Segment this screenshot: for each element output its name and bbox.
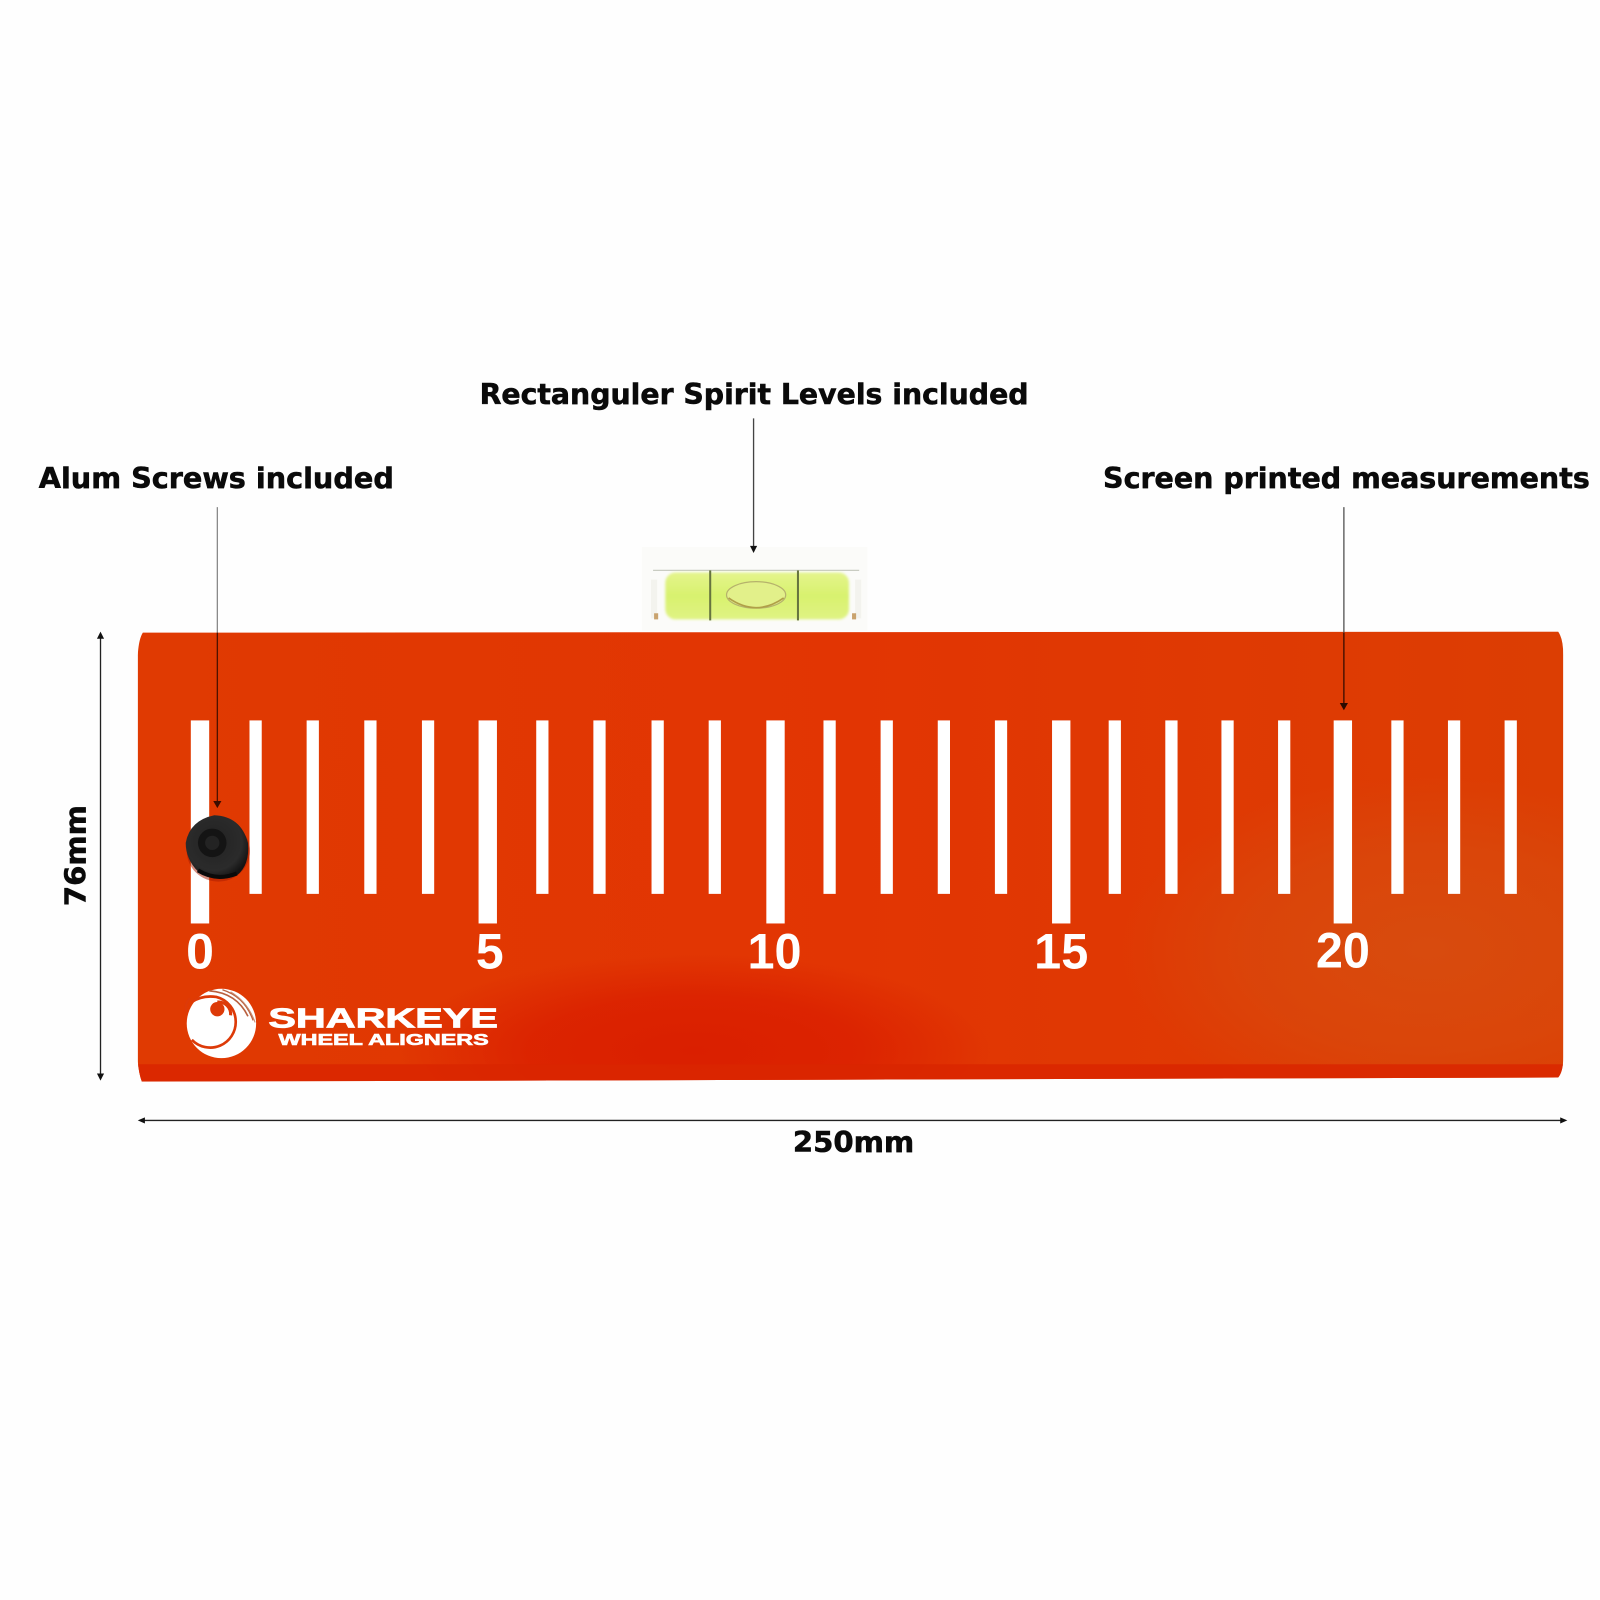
ruler numbers: 5 xyxy=(476,923,504,979)
Sharkeye logo xyxy=(186,989,498,1058)
label: 250mm: 250mm xyxy=(793,1126,914,1159)
ruler numbers: 15 xyxy=(1034,923,1088,979)
short ticks xyxy=(249,720,1517,894)
dimension arrow: height xyxy=(97,632,104,1081)
label: spirit levels: Rectanguler Spirit Levels included xyxy=(480,378,1029,411)
label: 76mm: 76mm xyxy=(60,805,93,906)
ruler numbers: 20 xyxy=(1316,922,1370,978)
Sharkeye logo: SHARKEYE xyxy=(268,1003,498,1034)
logo emblem xyxy=(186,989,256,1058)
colour variation patches xyxy=(454,822,1564,1081)
arrow: screen printed xyxy=(1340,507,1348,710)
Sharkeye logo: WHEEL ALIGNERS xyxy=(279,1032,489,1049)
dimension arrow: width xyxy=(138,1117,1567,1123)
level liquid vial xyxy=(665,572,849,619)
ruler numbers: 10 xyxy=(747,923,802,979)
red ruler plate xyxy=(138,632,1564,1082)
spirit level xyxy=(642,547,867,631)
ruler numbers xyxy=(188,932,1368,969)
level bubble xyxy=(727,582,786,608)
arrow: spirit levels xyxy=(750,418,757,553)
ruler numbers: 0 xyxy=(186,923,214,979)
label: screen printed: Screen printed measurements xyxy=(1103,462,1590,495)
label: alum screws: Alum Screws included xyxy=(39,462,394,495)
screw xyxy=(186,815,250,882)
arrow: alum screws xyxy=(213,507,221,808)
long ticks xyxy=(191,720,1352,923)
